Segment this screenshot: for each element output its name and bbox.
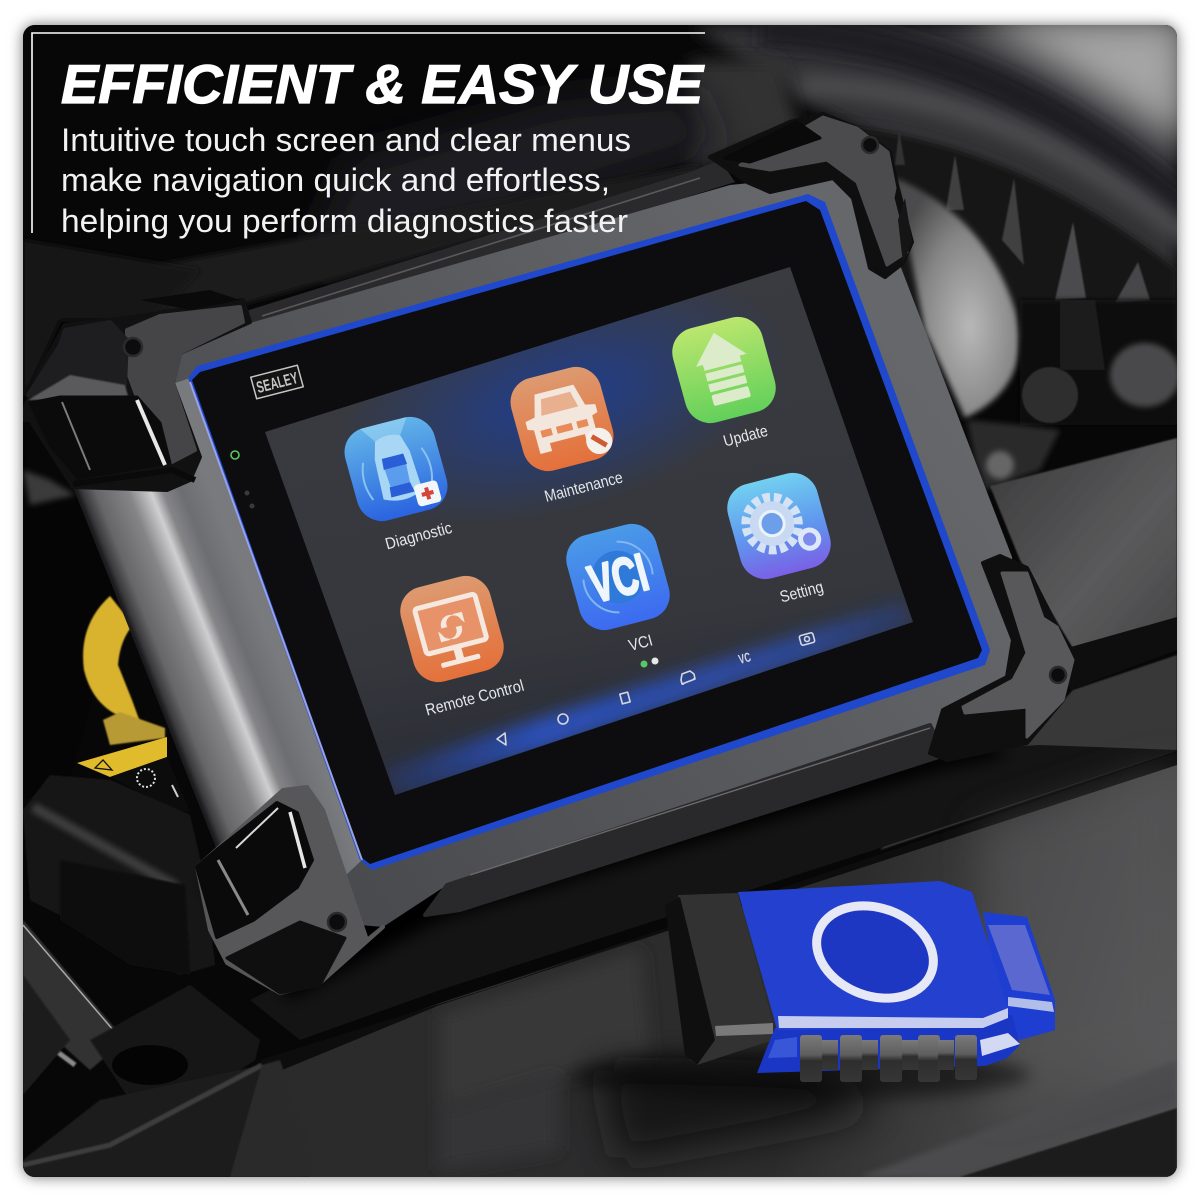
description text: Intuitive touch screen and clear menus (61, 122, 631, 158)
page dots (640, 658, 658, 668)
bumper: top left (20, 290, 250, 490)
app labels: VCI (627, 631, 655, 655)
description text: helping you perform diagnostics faster (61, 203, 628, 239)
bumper: bottom right (930, 556, 1073, 760)
app icon: Update (672, 316, 776, 424)
app icon: Setting (727, 472, 831, 580)
battery warning label (77, 737, 179, 798)
shadow (285, 752, 998, 998)
app icon: VCI: VCI (583, 544, 654, 615)
silver dome (895, 178, 1019, 418)
title: EFFICIENT & EASY USE (61, 53, 705, 115)
fixing screws (124, 137, 1066, 931)
app labels: Update (721, 422, 770, 451)
app icon: VCI (566, 524, 670, 630)
left edge highlight (190, 382, 362, 860)
touch screen display (265, 231, 915, 800)
black parts and knobs (967, 300, 1180, 490)
status lights (231, 451, 254, 508)
navigation icons (497, 632, 815, 745)
description text: make navigation quick and effortless, (61, 162, 610, 198)
right shelf (990, 438, 1177, 655)
left top shadow area (25, 242, 158, 386)
SEALEY logo: SEALEY (255, 369, 300, 397)
dongle plug (678, 893, 773, 1065)
blue screen border (188, 194, 990, 870)
app icon: Remote Control (400, 576, 504, 682)
battery block (23, 775, 215, 975)
handheld diagnostic tablet (20, 114, 1073, 1000)
main floor (262, 763, 1177, 1177)
aluminium side grip and left frame (73, 378, 362, 890)
app labels: Remote Control (423, 677, 526, 720)
dongle top face (738, 881, 1008, 1030)
bumper: bottom left (197, 787, 383, 993)
app labels (383, 422, 825, 720)
app labels: Diagnostic (383, 519, 454, 553)
top right blurred engine parts (160, 25, 1177, 326)
SEALEY logo (251, 365, 303, 399)
grey frame (173, 175, 1020, 927)
status ring (804, 890, 946, 1014)
yellow lifting ring (83, 596, 165, 745)
description text (61, 122, 631, 239)
app icon: Maintenance (510, 366, 614, 472)
app labels: Setting (778, 578, 825, 606)
app icon: Diagnostic (344, 416, 448, 522)
black glass bezel (192, 201, 982, 864)
screen glow (362, 297, 739, 510)
bottom navigation strip (380, 600, 915, 800)
dongle rear connector (983, 912, 1055, 1040)
dongle underside (757, 1015, 1020, 1073)
bumper: top right (710, 114, 912, 277)
bottom rail (425, 725, 945, 915)
rubber clips (800, 1035, 977, 1082)
lower left engine bay (23, 920, 320, 1177)
OBD VCI dongle (570, 881, 1055, 1100)
navigation icons: VC (737, 649, 753, 667)
app labels: Maintenance (542, 468, 625, 506)
top rail (243, 160, 735, 335)
header frame lines (32, 33, 705, 233)
